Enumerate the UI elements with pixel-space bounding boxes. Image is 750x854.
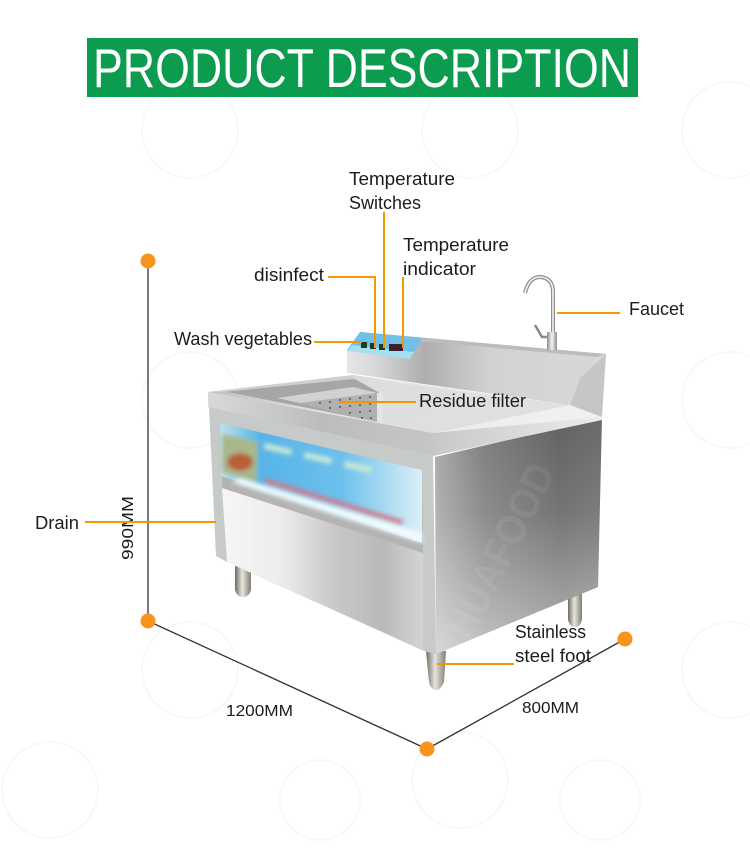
label: drain: Drain [35,513,79,533]
machine: washing sink [208,277,606,690]
front lower panel [222,488,423,650]
control panel [347,332,422,359]
backsplash with angled end [347,332,606,417]
label: wash vegetables: Wash vegetables [174,329,312,349]
poster band frame [220,423,423,553]
blurred poster [220,423,422,543]
front foot [426,651,446,690]
inner basin [223,378,433,433]
far legs [235,566,582,627]
counter and basin [208,375,602,434]
label: disinfect: disinfect [254,265,324,285]
front body frame [209,407,436,654]
label: temperature indicator: indicator [403,259,476,279]
label: temperature switches: Temperature [349,169,455,189]
faucet [525,277,557,350]
watermark on side panel: HUAFOOD [436,455,564,646]
label: faucet: Faucet [629,299,684,319]
dimension lines [120,254,632,756]
right side panel [435,418,602,654]
title banner: PRODUCT DESCRIPTION [93,37,631,99]
front rim [208,392,602,456]
label: temperature switches: Switches [349,193,421,213]
dimension markers [140,254,632,756]
height dimension: 990MM [120,496,137,560]
width dimension: 1200MM [226,703,293,720]
callout leader lines [85,212,620,664]
label: residue filter: Residue filter [419,391,526,411]
label: stainless steel foot: Stainless [515,622,586,642]
depth dimension: 800MM [522,700,579,717]
label: temperature indicator: Temperature [403,235,509,255]
rear left rim [208,375,354,392]
residue filter basket [277,387,383,423]
label: stainless steel foot: steel foot [515,646,591,666]
